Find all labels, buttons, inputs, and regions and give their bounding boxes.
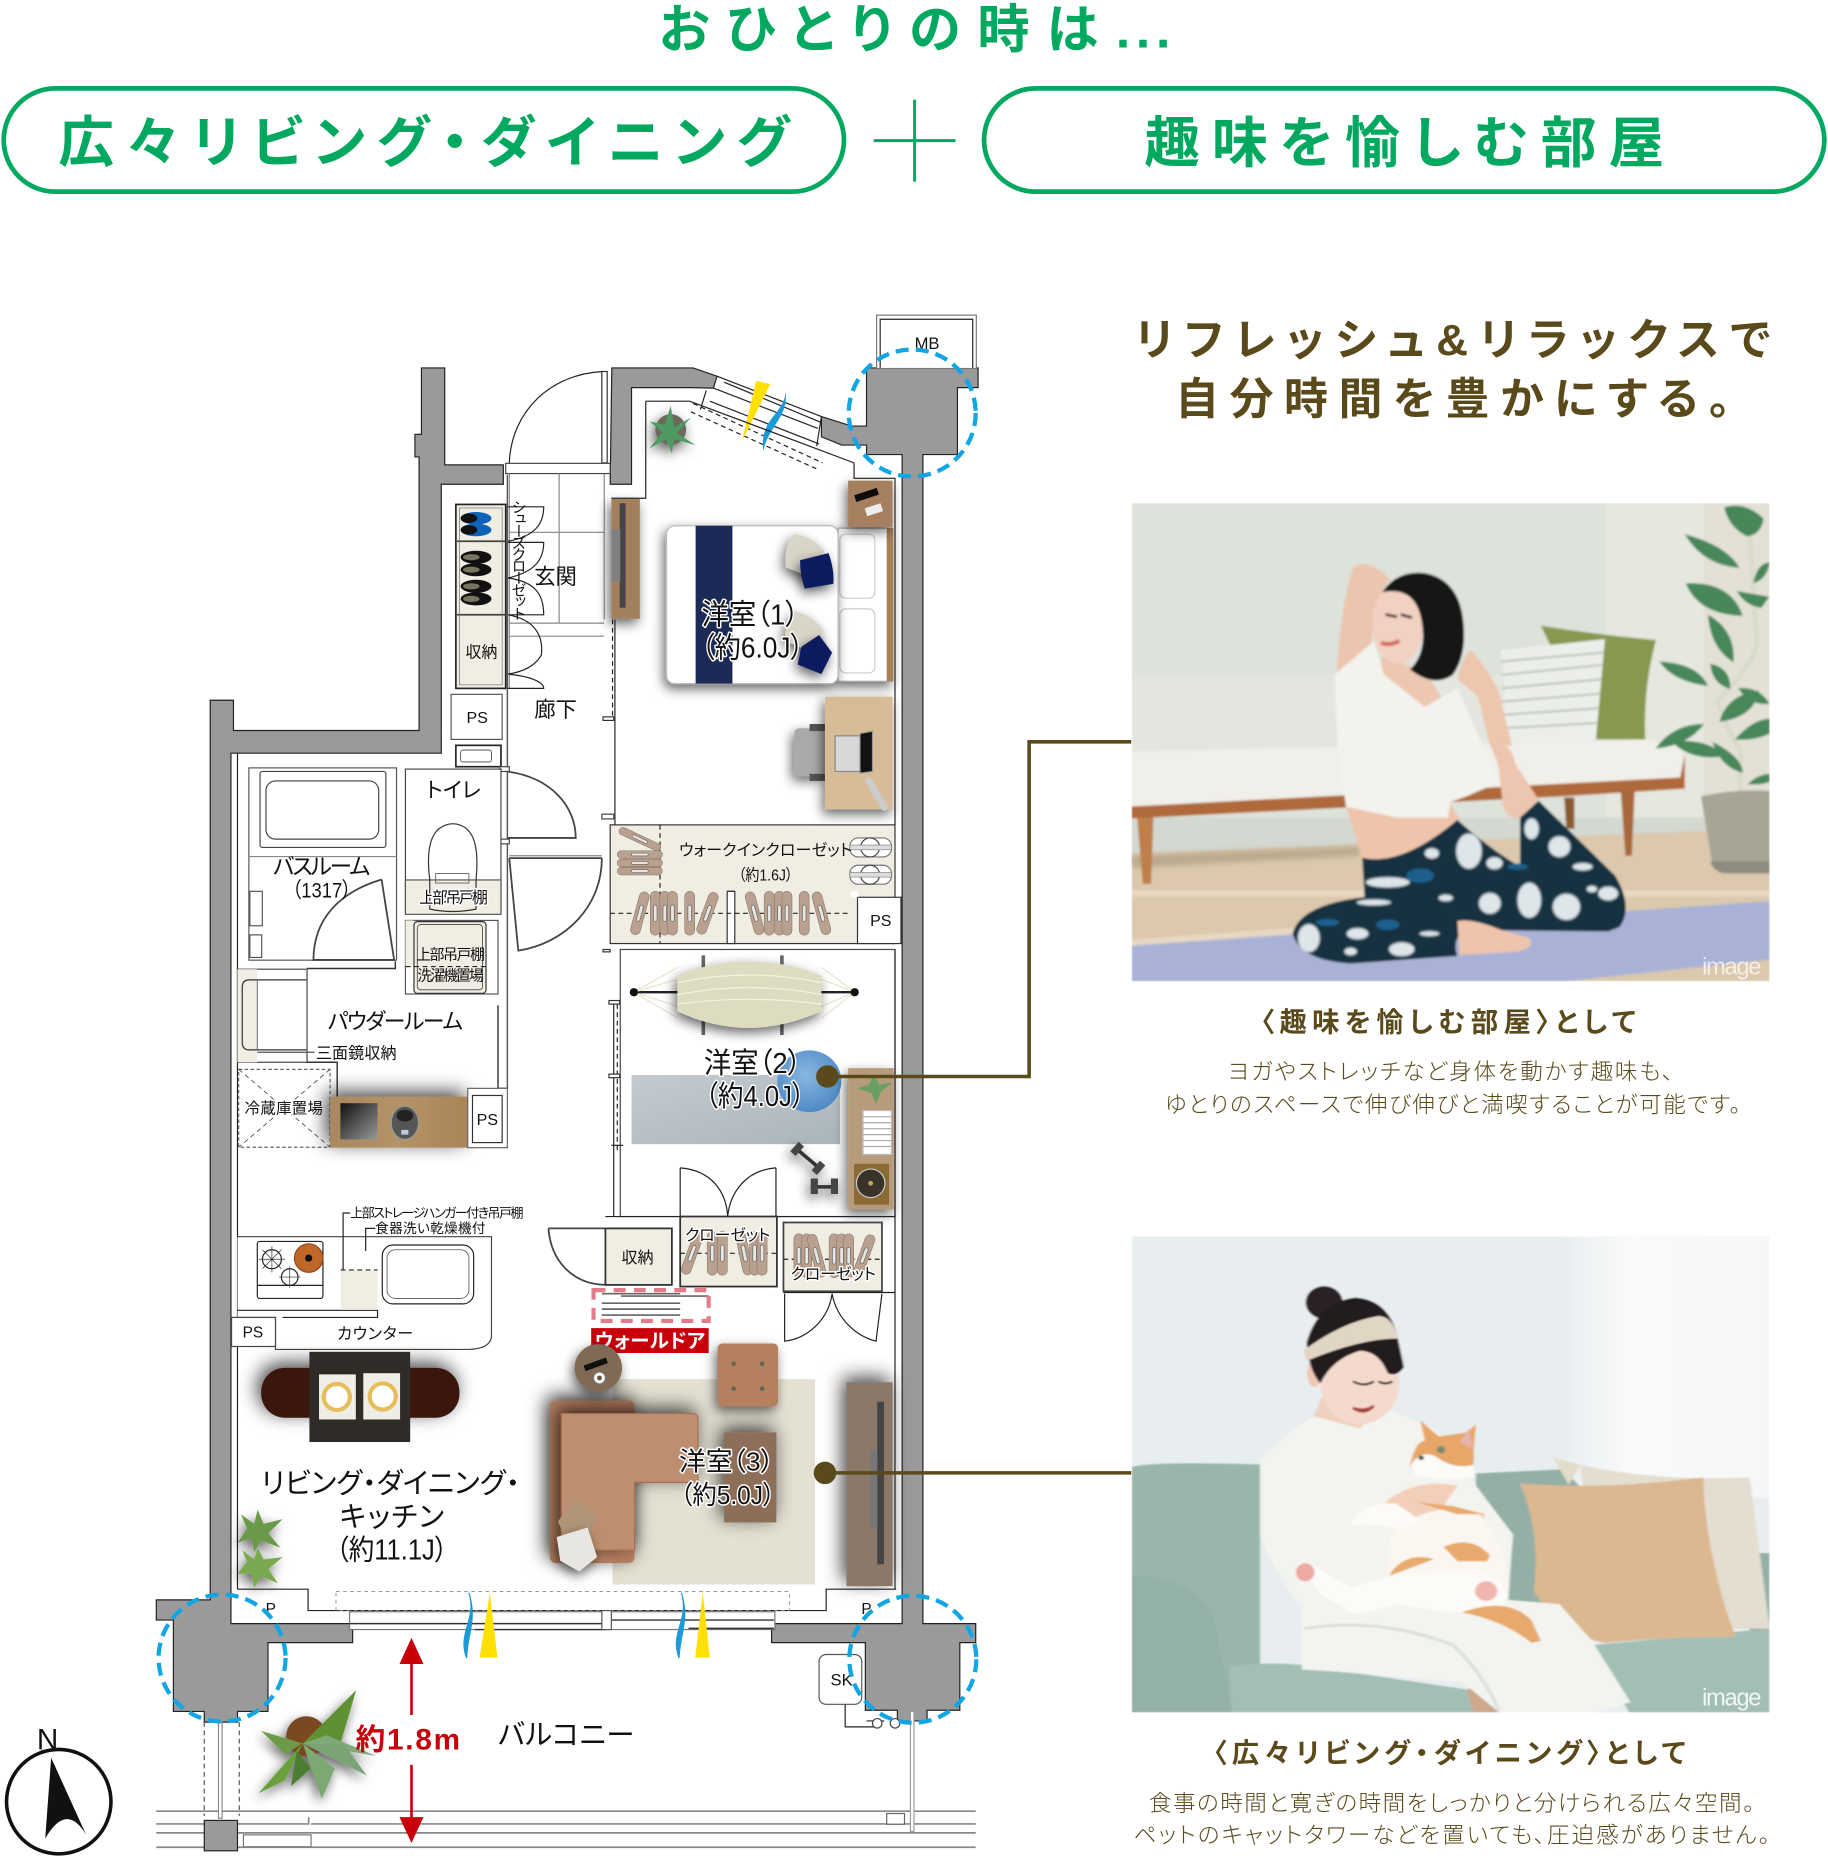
living window <box>336 1592 789 1658</box>
closet 1: クローゼット <box>685 1226 770 1244</box>
kitchen annotations: 食器洗い乾燥機付 <box>375 1221 486 1236</box>
neck <box>1313 1397 1364 1428</box>
label: 洋室(1) 約6.0J <box>702 598 804 665</box>
exercise ball <box>777 1050 841 1112</box>
heading: リフレッシュ&リラックスで 自分時間を豊かにする。: 自分時間を豊かにする。 <box>1175 375 1731 424</box>
walk-in closet contents <box>610 825 891 944</box>
label: image on cat photo: image <box>1702 1686 1761 1712</box>
closet 2 <box>783 1222 882 1291</box>
mat <box>1132 901 1770 981</box>
label: 洋室(3) 約5.0J: 洋室（3） <box>679 1447 774 1477</box>
label: 玄関: 玄関 <box>534 565 577 589</box>
coffee table <box>724 1432 776 1522</box>
kitchen annotations <box>343 1206 524 1270</box>
label: ウォークインクローゼット (約1.6J): ウォークインクローゼット <box>679 842 852 860</box>
balcony rails and lines <box>156 1711 976 1851</box>
PS box in kitchen <box>468 1088 507 1148</box>
meter box MB: MB <box>915 334 940 353</box>
PS box near hall: PS <box>467 709 488 727</box>
balcony plant <box>258 1690 376 1799</box>
entry door <box>506 371 610 474</box>
face <box>1320 1343 1399 1424</box>
plant in living <box>237 1510 283 1588</box>
face <box>1372 583 1423 664</box>
connector lines to photos <box>814 742 1131 1484</box>
closet doors swing <box>508 507 544 688</box>
kitchen annotations: 上部ストレージハンガー付き吊戸棚 <box>350 1206 524 1221</box>
dumbbells <box>793 1144 836 1194</box>
PS box in kitchen: PS <box>477 1111 498 1129</box>
doors in corridor <box>500 767 614 951</box>
plant in bedroom <box>649 406 696 453</box>
neck <box>1381 657 1441 708</box>
TV stand <box>846 1382 893 1586</box>
label: P east: P <box>861 1601 872 1618</box>
label: 廊下: 廊下 <box>534 698 577 722</box>
cat body <box>1390 1508 1492 1574</box>
washing machine place <box>405 920 498 994</box>
body text: 趣味: ゆとりのスペースで伸び伸びと満喫することが可能です。 <box>1165 1093 1741 1118</box>
label: P west: P <box>266 1601 276 1618</box>
closet doors below room divider <box>783 1292 895 1341</box>
room furnishings: room floors and built-in cream storage <box>456 504 901 1217</box>
right arm <box>1457 650 1512 746</box>
heading: リフレッシュ&リラックスで 自分時間を豊かにする。 <box>1135 316 1771 424</box>
label: 洋室(3) 約5.0J <box>679 1447 775 1510</box>
wall door mark <box>591 1290 709 1353</box>
bathroom door <box>313 879 394 960</box>
compass: N <box>37 1723 58 1756</box>
bedside table <box>848 481 893 527</box>
hair <box>1382 573 1464 680</box>
label: 三面鏡収納: 三面鏡収納 <box>316 1045 397 1063</box>
vanity <box>237 969 315 1062</box>
pill: 趣味を愉しむ部屋 <box>984 88 1824 192</box>
structural walls: east and bedroom window wall <box>610 368 978 1721</box>
plus sign <box>874 100 956 182</box>
title: おひとりの時は...: おひとりの時は <box>659 1 1098 59</box>
sofa <box>1132 1463 1260 1712</box>
hair <box>1306 1286 1343 1319</box>
SK sink on balcony: SK <box>831 1670 853 1689</box>
refrigerator place: 冷蔵庫置場 <box>245 1099 323 1117</box>
dining table set <box>261 1352 459 1442</box>
label: カウンター: カウンター <box>337 1325 413 1343</box>
label: ウォークインクローゼット (約1.6J): （約1.6J） <box>738 867 793 885</box>
pillows <box>1541 626 1656 740</box>
body text: 趣味 <box>1165 1059 1741 1118</box>
SK sink on balcony <box>819 1654 900 1728</box>
label: パウダールーム: パウダールーム <box>328 1009 463 1034</box>
body text: リビング <box>1134 1791 1770 1848</box>
pillows <box>1580 1465 1770 1629</box>
round side table <box>575 1344 622 1392</box>
photo: woman doing yoga <box>1132 503 1770 981</box>
label: リビング・ダイニング・キッチン 約11.1J: キッチン <box>340 1501 444 1533</box>
wall lines: powder room <box>307 961 508 1097</box>
compass <box>7 1723 111 1854</box>
label: 洋室(3) 約5.0J: （約5.0J） <box>680 1480 775 1510</box>
cat head <box>1409 1420 1478 1467</box>
closet doors room 2 <box>605 1168 895 1217</box>
belly <box>1346 804 1460 863</box>
label: リビング・ダイニング・キッチン 約11.1J <box>261 1468 520 1567</box>
label: リビング・ダイニング・キッチン 約11.1J: （約11.1J） <box>336 1535 448 1567</box>
heading: リフレッシュ&リラックスで 自分時間を豊かにする。: リフレッシュ&リラックスで <box>1135 316 1771 365</box>
bathroom <box>249 768 397 960</box>
label: image on yoga photo: image <box>1702 954 1761 980</box>
kitchen counter <box>237 1237 491 1349</box>
storage 収納 with door <box>548 1228 672 1285</box>
toilet tank box <box>456 745 501 767</box>
room 2 door lines <box>603 949 623 1217</box>
label: リビング・ダイニング・キッチン 約11.1J: リビング・ダイニング・ <box>261 1468 520 1500</box>
bed <box>667 526 893 684</box>
entrance floor grid and interior lines <box>237 401 896 1611</box>
title: おひとりの時は...: ... <box>1116 1 1170 59</box>
body text: リビング: ペットのキャットタワーなどを置いても、圧迫感がありません。 <box>1134 1823 1770 1848</box>
body text: 趣味: ヨガやストレッチなど身体を動かす趣味も、 <box>1228 1059 1673 1084</box>
leggings <box>1293 801 1626 964</box>
sofa <box>1132 740 1682 806</box>
bedroom window <box>691 376 823 470</box>
label: 洋室(2) 約4.0J: 洋室（2） <box>704 1047 801 1080</box>
photo: woman holding cat on sofa <box>1132 1236 1770 1712</box>
pill: 広々リビング・ダイニング <box>4 88 844 192</box>
yoga mat <box>632 1075 840 1144</box>
leggings flowers <box>1298 818 1618 956</box>
PS box west <box>232 1317 275 1346</box>
legs <box>1466 1688 1500 1712</box>
shelf with plant, books and turntable <box>848 1068 894 1209</box>
bedroom 1 furniture: TV board <box>611 499 640 619</box>
dress <box>1260 1408 1630 1712</box>
shoes in closet <box>461 512 491 605</box>
caption: 〈趣味を愉しむ部屋〉として: 〈趣味を愉しむ部屋〉として <box>1261 1006 1636 1037</box>
label: 収納: 収納 <box>465 644 497 662</box>
body text: リビング: 食事の時間と寛ぎの時間をしっかりと分けられる広々空間。 <box>1149 1791 1754 1816</box>
PS box west: PS <box>243 1325 263 1342</box>
desk with laptop and chair <box>794 697 893 809</box>
pot <box>1701 790 1770 867</box>
closet 2: クローゼット <box>791 1265 876 1283</box>
label: バスルーム (1317): （1317） <box>292 878 351 902</box>
foot raised <box>1489 742 1539 818</box>
toilet room: 上部吊戸棚 <box>419 889 488 907</box>
floor plan <box>156 315 978 1851</box>
refrigerator place <box>239 1069 330 1147</box>
wall door mark: ウォールドア <box>595 1331 705 1353</box>
label: PS walk-in: PS <box>870 912 891 930</box>
meter box MB <box>877 315 976 369</box>
storage 収納 with door: 収納 <box>621 1249 653 1267</box>
kitchen cabinet with microwave and rice cooker <box>330 1097 468 1148</box>
label: バスルーム (1317): バスルーム <box>273 855 371 880</box>
label: バスルーム (1317) <box>273 855 371 902</box>
dimension arrow <box>399 1638 423 1843</box>
label: 約1.8m: 約1.8m <box>356 1723 460 1756</box>
washing machine place: 洗濯機置場 <box>417 967 484 984</box>
label: シューズクローゼット: シューズクローゼット <box>510 500 526 621</box>
sofa <box>550 1400 698 1571</box>
PS box near hall <box>451 694 502 739</box>
pill: 広々リビング・ダイニング: 広々リビング・ダイニング <box>58 112 791 174</box>
pill: 趣味を愉しむ部屋: 趣味を愉しむ部屋 <box>1144 113 1664 175</box>
plant <box>1717 532 1757 795</box>
washing machine place: 上部吊戸棚 <box>416 947 485 964</box>
caption: 〈広々リビング・ダイニング〉として: 〈広々リビング・ダイニング〉として <box>1213 1737 1685 1768</box>
closet 1 <box>680 1217 777 1287</box>
shirt <box>1334 641 1499 818</box>
hammock <box>630 955 859 1035</box>
hands <box>1385 1483 1486 1519</box>
label: 洋室(2) 約4.0J <box>704 1047 805 1113</box>
label: 洋室(1) 約6.0J: 洋室（1） <box>702 598 799 631</box>
structural walls: west and entry <box>156 368 503 1722</box>
rug <box>613 1379 815 1584</box>
blue dashed circles: columns <box>159 350 976 1723</box>
label: ウォークインクローゼット (約1.6J) <box>679 842 852 885</box>
label: バルコニー: バルコニー <box>498 1720 634 1752</box>
label: 洋室(1) 約6.0J: （約6.0J） <box>702 632 804 665</box>
label: トイレ: トイレ <box>426 779 481 803</box>
label: 洋室(2) 約4.0J: （約4.0J） <box>705 1080 805 1113</box>
ottoman <box>718 1344 778 1406</box>
woman arm back <box>1337 564 1390 673</box>
toilet room <box>405 769 501 914</box>
